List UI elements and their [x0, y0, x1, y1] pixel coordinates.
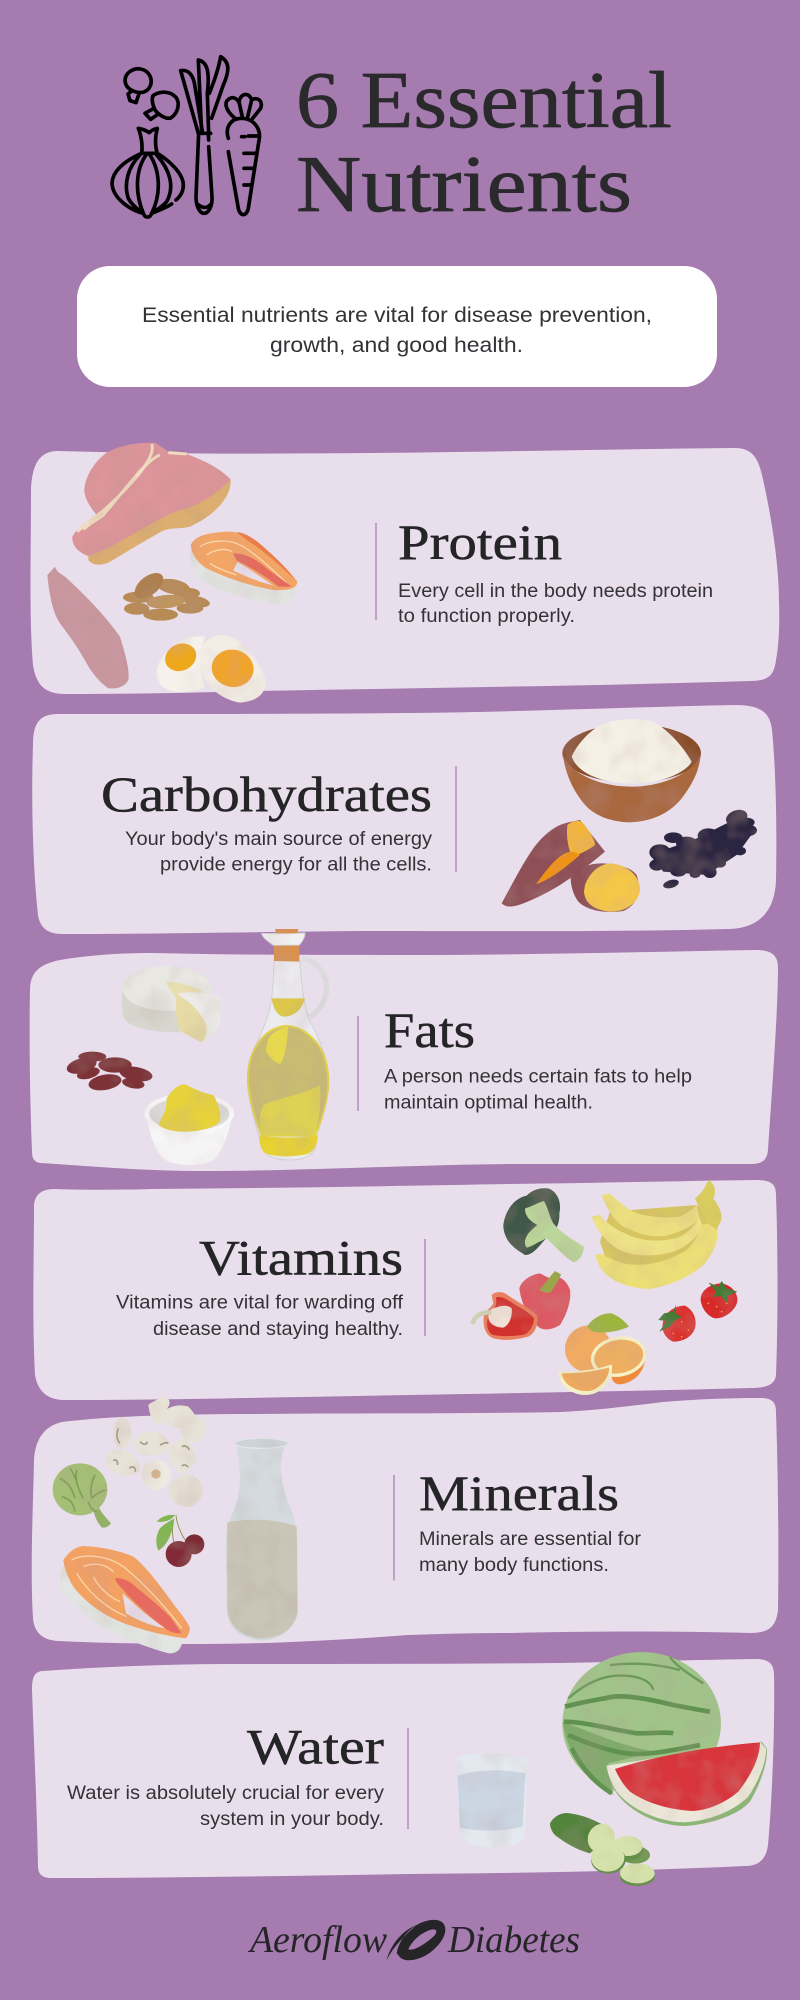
divider	[375, 523, 377, 620]
mushrooms	[106, 1396, 206, 1507]
body text	[67, 1783, 385, 1830]
turkey breast	[47, 567, 129, 689]
panel shape	[32, 1659, 774, 1878]
glass of water	[455, 1753, 527, 1848]
body text	[398, 581, 713, 627]
body text: to function properly.	[398, 606, 575, 627]
body text	[419, 1529, 642, 1576]
illustration: water foods	[455, 1652, 767, 1886]
panel shape	[30, 950, 778, 1171]
panel: water	[32, 1652, 774, 1886]
heading: Minerals	[419, 1465, 619, 1521]
divider	[357, 1016, 359, 1111]
divider	[455, 766, 457, 872]
bananas	[592, 1180, 721, 1289]
panel: minerals	[32, 1396, 778, 1653]
sweet potato	[502, 820, 640, 912]
icon: vegetables line art	[112, 57, 261, 217]
intro callout: growth, and good health.	[270, 334, 523, 357]
panel shape	[30, 448, 779, 694]
watermelon	[562, 1652, 767, 1826]
steak	[72, 443, 231, 565]
broccoli	[503, 1188, 584, 1262]
almonds	[123, 568, 211, 621]
body text	[384, 1066, 692, 1114]
title: Nutrients	[296, 141, 632, 229]
panel shape	[32, 705, 776, 934]
heading: Vitamins	[199, 1230, 403, 1286]
logo mark	[387, 1920, 445, 1960]
illustration: mineral foods	[53, 1396, 298, 1653]
black beans	[649, 807, 757, 890]
salmon steak	[190, 532, 297, 604]
body text: system in your body.	[200, 1809, 384, 1830]
boiled eggs	[157, 635, 266, 703]
intro callout	[77, 266, 717, 387]
title	[296, 57, 672, 229]
body text: Water is absolutely crucial for every	[67, 1783, 385, 1804]
illustration: vitamin foods	[473, 1180, 737, 1395]
logo: Aeroflow Diabetes: Aeroflow	[247, 1919, 388, 1961]
cherries	[156, 1515, 204, 1567]
illustration: fat foods	[65, 929, 328, 1165]
body text: many body functions.	[419, 1555, 609, 1576]
divider	[424, 1239, 426, 1336]
body text: Vitamins are vital for warding off	[116, 1292, 404, 1314]
cheese wheel	[122, 966, 221, 1042]
panel: vitamins	[33, 1180, 778, 1400]
logo: Aeroflow Diabetes	[247, 1919, 580, 1961]
panel shape	[32, 1398, 778, 1644]
butter in bowl	[145, 1084, 234, 1165]
divider	[407, 1728, 409, 1829]
panel: protein	[30, 443, 779, 703]
red bell peppers	[473, 1271, 570, 1340]
divider	[393, 1475, 395, 1580]
milk bottle	[226, 1438, 298, 1641]
heading: Carbohydrates	[101, 766, 432, 822]
heading: Protein	[398, 514, 562, 570]
heading: Fats	[384, 1002, 475, 1058]
panel: fats	[30, 929, 778, 1171]
body text: A person needs certain fats to help	[384, 1066, 692, 1088]
body text: Minerals are essential for	[419, 1529, 642, 1550]
panel: carbohydrates	[32, 705, 776, 934]
body text	[116, 1292, 404, 1340]
artichoke	[53, 1463, 111, 1528]
body text: maintain optimal health.	[384, 1092, 593, 1114]
strawberries	[658, 1281, 737, 1342]
illustration: carbohydrate foods	[502, 719, 757, 912]
body text: disease and staying healthy.	[153, 1319, 403, 1340]
body text: Every cell in the body needs protein	[398, 581, 713, 602]
cucumber	[550, 1813, 655, 1886]
bowl of rice	[562, 719, 701, 822]
heading: Water	[247, 1718, 384, 1774]
salmon steak	[60, 1546, 190, 1653]
intro callout: Essential nutrients are vital for disease prevention,	[142, 304, 652, 327]
logo: Aeroflow Diabetes: Diabetes	[447, 1919, 580, 1961]
illustration: protein foods	[47, 443, 297, 703]
body text: Your body's main source of energy	[125, 829, 433, 850]
body text: provide energy for all the cells.	[160, 854, 432, 876]
oranges	[558, 1313, 650, 1395]
panel shape	[33, 1180, 778, 1400]
title: 6 Essential	[296, 57, 672, 145]
body text	[125, 829, 433, 876]
olive oil bottle	[247, 929, 328, 1160]
kidney beans	[65, 1052, 154, 1093]
